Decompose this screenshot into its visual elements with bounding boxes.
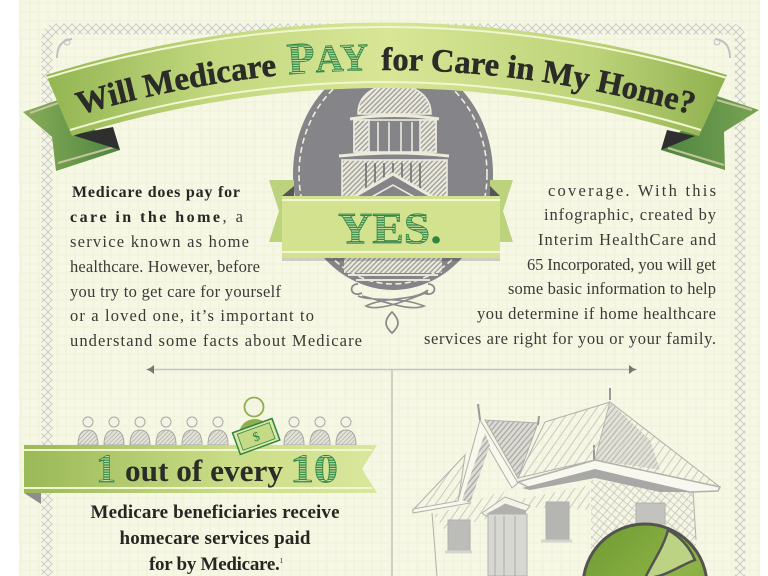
intro text left column: service known as home [70, 232, 249, 251]
statistic caption [90, 502, 340, 575]
capitol coin emblem [293, 58, 493, 333]
intro text left column: Medicare does pay for [72, 184, 240, 201]
intro text left column [70, 184, 362, 350]
banner back tabs [269, 180, 513, 242]
highlighted person with money icon: $ [251, 428, 262, 445]
left ribbon tail [23, 100, 120, 171]
intro text left column: healthcare. However, before [70, 257, 260, 276]
intro text left column: you try to get care for yourself [70, 282, 282, 301]
intro text right column: infographic, created by [544, 205, 717, 224]
yes banner [269, 180, 513, 261]
statistic caption: homecare services paid [120, 528, 311, 549]
1 out of every 10 banner: out of every [125, 453, 283, 488]
title ribbon [23, 22, 759, 171]
windows and door [448, 520, 470, 551]
house sketch [413, 388, 720, 576]
title ribbon: for Care in My Home? [381, 46, 695, 113]
intro text right column: coverage. With this [548, 181, 716, 200]
title text: Will Medicare [74, 60, 276, 113]
capitol building [339, 85, 449, 200]
statistic caption: for by Medicare. [149, 554, 280, 575]
1 out of every 10 banner: 10 [290, 446, 338, 491]
eaves [518, 460, 720, 492]
intro text left column: understand some facts about Medicare [70, 331, 362, 350]
intro text right column: services are right for you or your family. [424, 329, 716, 348]
intro text right column: you determine if home healthcare [477, 304, 716, 323]
intro text right column: some basic information to help [508, 279, 716, 298]
1 out of every 10 banner [24, 445, 377, 504]
coin lower base and flourish [344, 258, 442, 333]
intro text right column [424, 181, 717, 348]
people row icons [78, 417, 356, 445]
yes heading: YES. [338, 204, 442, 253]
statistic caption: Medicare beneficiaries receive [90, 502, 340, 523]
highlighted person with money icon [233, 398, 280, 454]
banner text: 1 [96, 446, 116, 491]
intro text left column: or a loved one, it’s important to [70, 306, 314, 325]
right ribbon tail [661, 96, 759, 170]
gable and roofs [413, 455, 465, 510]
title ribbon: PAY [286, 44, 368, 75]
house walls [432, 490, 696, 576]
intro text left column: care in the home, a [70, 207, 244, 226]
intro text right column: Interim HealthCare and [538, 230, 717, 249]
statistic caption: 1 [280, 557, 284, 565]
intro text right column: 65 Incorporated, you will get [527, 255, 716, 274]
section dividers [146, 365, 637, 576]
pie chart [583, 524, 707, 576]
